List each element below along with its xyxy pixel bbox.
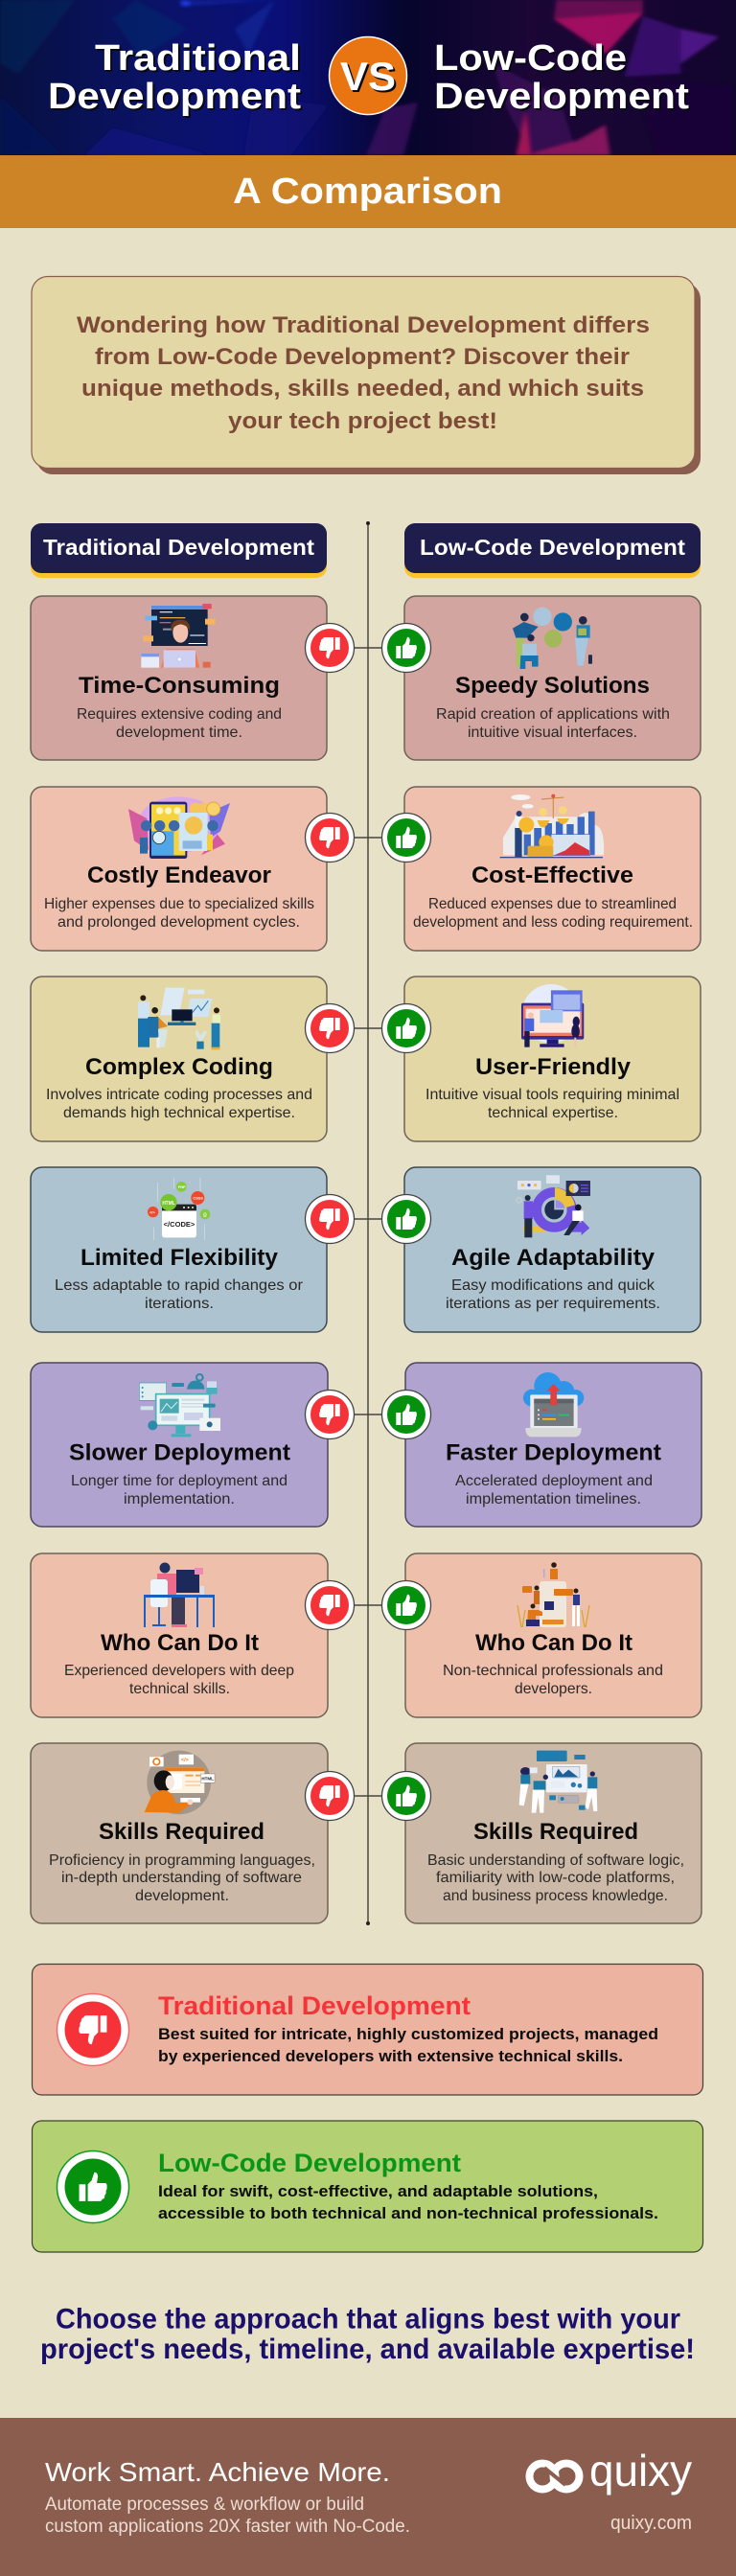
subtitle band <box>0 155 736 228</box>
icon: code window with language bubbles: {} <box>203 1212 207 1218</box>
icon: laptop uploading to cloud <box>523 1372 584 1437</box>
icon: teal dashboard monitor <box>139 1374 220 1437</box>
title: traditional development: Development <box>48 77 301 117</box>
panel: introduction: your tech project best! <box>228 408 497 434</box>
column heading: traditional development <box>31 523 327 578</box>
icon: thumbs up, row 5 <box>381 1390 431 1439</box>
icon: coder with code bubbles: HTML <box>201 1777 214 1782</box>
icon: thumbs down, row 7 <box>305 1771 355 1821</box>
title: low-code development: Development <box>434 77 689 117</box>
icon: thumbs up, row 6 <box>381 1581 431 1629</box>
footer description: Automate processes & workflow or build <box>45 2495 364 2515</box>
column heading: low-code development <box>404 523 701 578</box>
icon: phone with coins <box>128 796 230 859</box>
panel: skills required, low-code <box>405 1743 702 1923</box>
closing call to action: project's needs, timeline, and available expertise! <box>40 2334 695 2365</box>
description: Experienced developers with deep <box>64 1663 294 1679</box>
panel: limited flexibility <box>31 1167 327 1332</box>
panel: costly endeavor <box>31 787 327 951</box>
panel: cost-effective <box>404 787 701 951</box>
description <box>71 1473 288 1507</box>
description: development time. <box>116 724 242 741</box>
icon: monitor with users <box>521 984 584 1047</box>
icon: team around phone <box>518 1562 589 1627</box>
heading: Skills Required <box>99 1819 264 1845</box>
icon: thumbs down, row 5 <box>305 1390 355 1439</box>
panel: speedy solutions <box>404 596 701 760</box>
icon: code window with language bubbles: HTML <box>162 1201 175 1207</box>
subtitle band: A Comparison <box>233 172 502 212</box>
icon: thumbs down, row 1 <box>305 623 355 673</box>
panel: footer <box>0 2418 736 2576</box>
icon: code window with language bubbles: </CODE> <box>164 1220 196 1229</box>
description: by experienced developers with extensive technical skills. <box>158 2047 623 2065</box>
description: accessible to both technical and non-technical professionals. <box>158 2204 658 2222</box>
icon: large thumbs down <box>58 1993 128 2066</box>
heading: Speedy Solutions <box>455 673 650 699</box>
panel: introduction <box>32 276 701 474</box>
icon: developer at desk <box>144 1562 215 1627</box>
icon: thumbs up, row 2 <box>381 813 431 862</box>
description: and prolonged development cycles. <box>58 914 300 931</box>
title: low-code development: Low-Code <box>434 38 627 79</box>
description <box>55 1277 304 1312</box>
description: Less adaptable to rapid changes or <box>55 1277 304 1294</box>
description: Requires extensive coding and <box>77 706 282 723</box>
footer tagline: Work Smart. Achieve More. <box>45 2457 390 2487</box>
description: and business process knowledge. <box>443 1888 668 1904</box>
description: iterations. <box>145 1296 214 1312</box>
icon: bar chart and scale <box>500 794 604 858</box>
heading: Time-Consuming <box>79 673 280 699</box>
description <box>77 706 282 741</box>
description: developers. <box>515 1681 592 1697</box>
heading: Agile Adaptability <box>451 1245 656 1271</box>
footer description <box>45 2495 410 2537</box>
description: implementation timelines. <box>466 1491 641 1507</box>
icon: developer at code window <box>141 604 216 668</box>
closing call to action: Choose the approach that aligns best with your <box>56 2304 680 2334</box>
description: Longer time for deployment and <box>71 1473 288 1489</box>
heading: Costly Endeavor <box>87 862 271 888</box>
description: Easy modifications and quick <box>451 1277 656 1294</box>
icon: large thumbs up <box>58 2150 128 2223</box>
icon: code window with language bubbles <box>148 1178 210 1240</box>
panel: complex coding <box>31 977 327 1141</box>
description: intuitive visual interfaces. <box>468 724 637 741</box>
icon: thumbs up, row 1 <box>381 623 431 673</box>
description <box>49 1852 315 1904</box>
icon: VS badge: VS <box>340 54 396 99</box>
title: traditional development: Traditional <box>95 38 301 79</box>
description <box>44 896 314 931</box>
icon: thumbs down, row 4 <box>305 1194 355 1244</box>
description: Non-technical professionals and <box>443 1663 663 1679</box>
heading: Faster Deployment <box>446 1439 661 1466</box>
heading: Skills Required <box>473 1819 638 1845</box>
icon: thumbs up, row 7 <box>381 1771 431 1821</box>
description <box>413 896 693 931</box>
icon: coder with code bubbles: </> <box>181 1758 189 1763</box>
panel: time-consuming <box>31 596 327 760</box>
panel: skills required, traditional <box>31 1743 328 1923</box>
brand name: quixy <box>589 2446 692 2496</box>
description: Ideal for swift, cost-effective, and adaptable solutions, <box>158 2182 598 2200</box>
description <box>158 2182 658 2222</box>
icon: code window with language bubbles: PHP <box>178 1185 186 1189</box>
description <box>64 1663 294 1697</box>
icon: quixy logo <box>529 2463 579 2490</box>
icon: thumbs up, row 3 <box>381 1004 431 1052</box>
description <box>158 2025 658 2065</box>
icon: ring chart with team <box>517 1175 590 1237</box>
description <box>446 1277 660 1312</box>
description: Basic understanding of software logic, <box>427 1852 684 1869</box>
panel: header banner <box>0 0 736 156</box>
heading: Low-Code Development <box>158 2149 461 2177</box>
icon: code window with language bubbles: CSS3 <box>193 1196 204 1201</box>
description: Involves intricate coding processes and <box>46 1087 312 1103</box>
description: technical expertise. <box>488 1105 618 1121</box>
description: Best suited for intricate, highly customized projects, managed <box>158 2025 658 2043</box>
heading: Cost-Effective <box>472 862 633 888</box>
description: Intuitive visual tools requiring minimal <box>426 1087 679 1103</box>
title: low-code development <box>434 38 689 117</box>
column heading: traditional development: Traditional Development <box>43 535 314 560</box>
panel: introduction: unique methods, skills needed, and which suits <box>81 376 644 402</box>
description: implementation. <box>124 1491 235 1507</box>
description: demands high technical expertise. <box>63 1105 295 1121</box>
panel: agile adaptability <box>404 1167 701 1332</box>
icon: thumbs down, row 6 <box>305 1581 355 1629</box>
description: development. <box>135 1888 229 1904</box>
description <box>455 1473 653 1507</box>
icon: thumbs down, row 2 <box>305 813 355 862</box>
description: Proficiency in programming languages, <box>49 1852 315 1869</box>
footer description: custom applications 20X faster with No-Code. <box>45 2517 410 2537</box>
heading: User-Friendly <box>475 1054 632 1080</box>
description: Reduced expenses due to streamlined <box>428 896 677 912</box>
icon: VS badge <box>330 36 406 115</box>
description: Accelerated deployment and <box>455 1473 653 1489</box>
icon: thumbs down, row 3 <box>305 1004 355 1052</box>
description: Rapid creation of applications with <box>436 706 670 723</box>
heading: Limited Flexibility <box>80 1245 279 1271</box>
panel: introduction: from Low-Code Development? Discover their <box>95 344 630 370</box>
description: iterations as per requirements. <box>446 1296 660 1312</box>
description <box>443 1663 663 1697</box>
panel: who can do it, traditional <box>31 1553 328 1717</box>
title: traditional development <box>48 38 301 117</box>
heading: Slower Deployment <box>69 1439 290 1466</box>
panel: low-code development summary <box>33 2121 703 2252</box>
icon: team assembling puzzle <box>513 608 592 669</box>
description <box>46 1087 312 1121</box>
description: Higher expenses due to specialized skills <box>44 896 314 912</box>
heading: Complex Coding <box>85 1054 273 1080</box>
panel: who can do it, low-code <box>405 1553 702 1717</box>
icon: team around analytics board <box>519 1751 597 1813</box>
row connectors and badges <box>305 623 431 1821</box>
heading: Who Can Do It <box>475 1630 632 1656</box>
icon: code window with language bubbles: </> <box>150 1209 155 1214</box>
description <box>426 1087 679 1121</box>
icon: thumbs up, row 4 <box>381 1194 431 1244</box>
description: familiarity with low-code platforms, <box>436 1870 675 1886</box>
description <box>427 1852 684 1904</box>
panel: faster deployment <box>405 1363 702 1527</box>
panel: traditional development summary <box>33 1965 703 2095</box>
column heading: low-code development: Low-Code Development <box>420 535 685 560</box>
description: in-depth understanding of software <box>61 1870 302 1886</box>
heading: Who Can Do It <box>101 1630 259 1656</box>
description: development and less coding requirement. <box>413 914 693 931</box>
heading: Traditional Development <box>158 1991 471 2020</box>
icon: team at workstation <box>138 988 220 1049</box>
panel: introduction: Wondering how Traditional Development differs <box>77 312 650 338</box>
icon: coder with code bubbles <box>145 1751 215 1814</box>
description <box>436 706 670 741</box>
panel: slower deployment <box>31 1363 328 1527</box>
panel: user-friendly <box>404 977 701 1141</box>
description: technical skills. <box>129 1681 230 1697</box>
closing call to action <box>40 2304 695 2365</box>
website: quixy.com <box>610 2513 692 2534</box>
